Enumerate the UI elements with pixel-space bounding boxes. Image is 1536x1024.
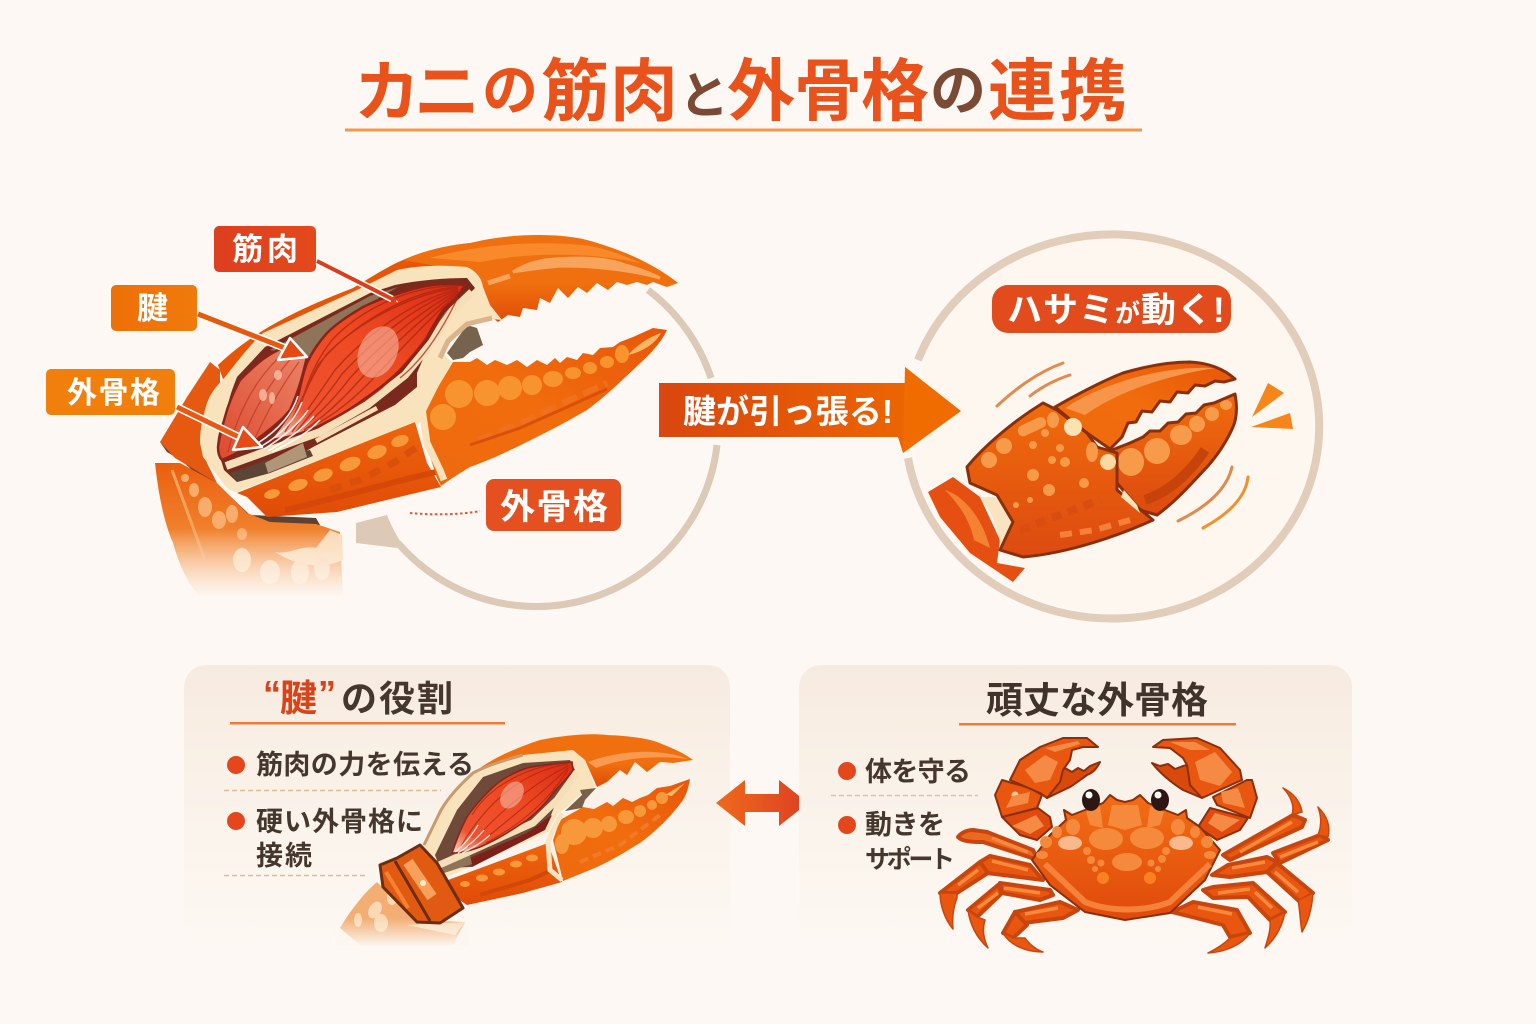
tan tissue behind muscles xyxy=(270,287,398,360)
title: 連携 xyxy=(988,54,1127,130)
arm stub xyxy=(928,477,1025,582)
crab eyes xyxy=(1082,789,1169,811)
fixed finger xyxy=(425,328,667,486)
title xyxy=(345,54,1142,132)
bullet: 動きをサポート: サポート xyxy=(865,846,955,874)
title: 筋肉 xyxy=(541,54,678,130)
dark joint behind claw xyxy=(160,442,320,532)
panel: sturdy exoskeleton xyxy=(799,665,1352,945)
arrow: 腱が引っ張る! xyxy=(659,367,961,453)
panel heading: の役割 xyxy=(341,678,453,719)
label: 外骨格 with arrow xyxy=(46,369,262,450)
label: 外骨格 callout with dotted leader: 外骨格 xyxy=(500,488,608,527)
bullet: 動きをサポート: 動きを xyxy=(865,810,945,840)
collar joint xyxy=(380,845,463,923)
lower claw body xyxy=(440,843,562,905)
muscle xyxy=(452,762,573,853)
title: と xyxy=(679,68,729,124)
right walking legs xyxy=(1172,788,1329,953)
bullet: 筋肉の力を伝える: 筋肉の力を伝える xyxy=(256,750,474,780)
small muscle xyxy=(218,345,307,460)
shell spots xyxy=(1036,805,1216,884)
label: 外骨格 callout with dotted leader xyxy=(410,479,621,531)
label: 腱 with arrow xyxy=(111,285,307,360)
bullet: 動きをサポート xyxy=(838,810,955,874)
title: の xyxy=(930,59,986,122)
left leg highlights xyxy=(958,838,1058,914)
spots on claw body xyxy=(263,433,410,500)
illustration: small claw with muscle xyxy=(335,734,693,946)
fixed finger xyxy=(1112,394,1236,515)
panel heading: 頑丈な外骨格 xyxy=(986,680,1208,721)
bullet: 体を守る xyxy=(831,757,978,796)
brown knuckle between fingers xyxy=(447,325,483,360)
panel heading: “ xyxy=(263,673,281,714)
illustration: moving claw xyxy=(928,362,1236,582)
claw arm segment xyxy=(140,463,354,598)
crab shell xyxy=(1032,795,1220,920)
panel: role of tendon xyxy=(184,665,730,946)
bullet: 体を守る: 体を守る xyxy=(865,757,971,787)
motion lines and sparks xyxy=(997,363,1293,528)
upper carapace strip xyxy=(218,243,495,385)
arrow: 腱が引っ張る!: 腱が引っ張る! xyxy=(683,393,893,430)
left walking legs xyxy=(940,830,1078,952)
bullet: 硬い外骨格に接続 xyxy=(224,807,423,876)
white tendon fan xyxy=(258,396,320,452)
title: の xyxy=(482,59,538,122)
finger highlight xyxy=(588,752,688,768)
panel heading: ” xyxy=(318,673,336,714)
label: 筋肉 with arrow xyxy=(214,226,398,302)
label: 腱 with arrow: 腱 xyxy=(137,291,168,326)
illustration: crab claw cross-section xyxy=(140,235,678,598)
left carapace chunk xyxy=(160,362,220,483)
cutaway cream frame xyxy=(200,266,502,492)
interior xyxy=(435,760,575,868)
cutaway frame xyxy=(422,750,595,880)
label: 外骨格 with arrow: 外骨格 xyxy=(67,377,160,410)
knuckle xyxy=(565,788,596,811)
arrow head over circle xyxy=(903,367,961,453)
cream joint divider xyxy=(415,415,444,480)
right claw xyxy=(1152,738,1257,840)
callout circle: moving claw xyxy=(908,234,1319,618)
movable finger xyxy=(1055,362,1235,449)
label: 筋肉 with arrow: 筋肉 xyxy=(232,232,298,267)
title: カニ xyxy=(354,55,480,129)
chip: ハサミが動く!: ハサミが動く! xyxy=(1007,291,1226,330)
left claw xyxy=(995,738,1100,840)
palm xyxy=(967,403,1153,557)
cream divider xyxy=(548,813,562,880)
cutaway dark interior xyxy=(217,278,475,482)
double arrow xyxy=(716,780,808,826)
panel heading xyxy=(230,673,505,724)
fixed finger xyxy=(553,779,690,881)
movable finger xyxy=(403,235,678,322)
arm xyxy=(335,882,470,946)
panel heading: 腱 xyxy=(280,678,317,719)
lower claw body xyxy=(237,422,441,517)
bullet: 筋肉の力を伝える xyxy=(224,750,474,790)
bullet: 硬い外骨格に接続: 硬い外骨格に xyxy=(256,807,423,837)
illustration: whole crab xyxy=(940,738,1329,953)
title: 外骨格 xyxy=(727,54,929,130)
cream band under muscle xyxy=(226,292,472,466)
movable finger xyxy=(473,734,693,787)
bullet: 硬い外骨格に接続: 接続 xyxy=(256,841,312,871)
large muscle with fibres xyxy=(270,284,465,440)
tan tendon at base xyxy=(230,408,377,482)
right leg highlights xyxy=(1198,822,1318,914)
callout circle: anatomy xyxy=(356,290,717,607)
